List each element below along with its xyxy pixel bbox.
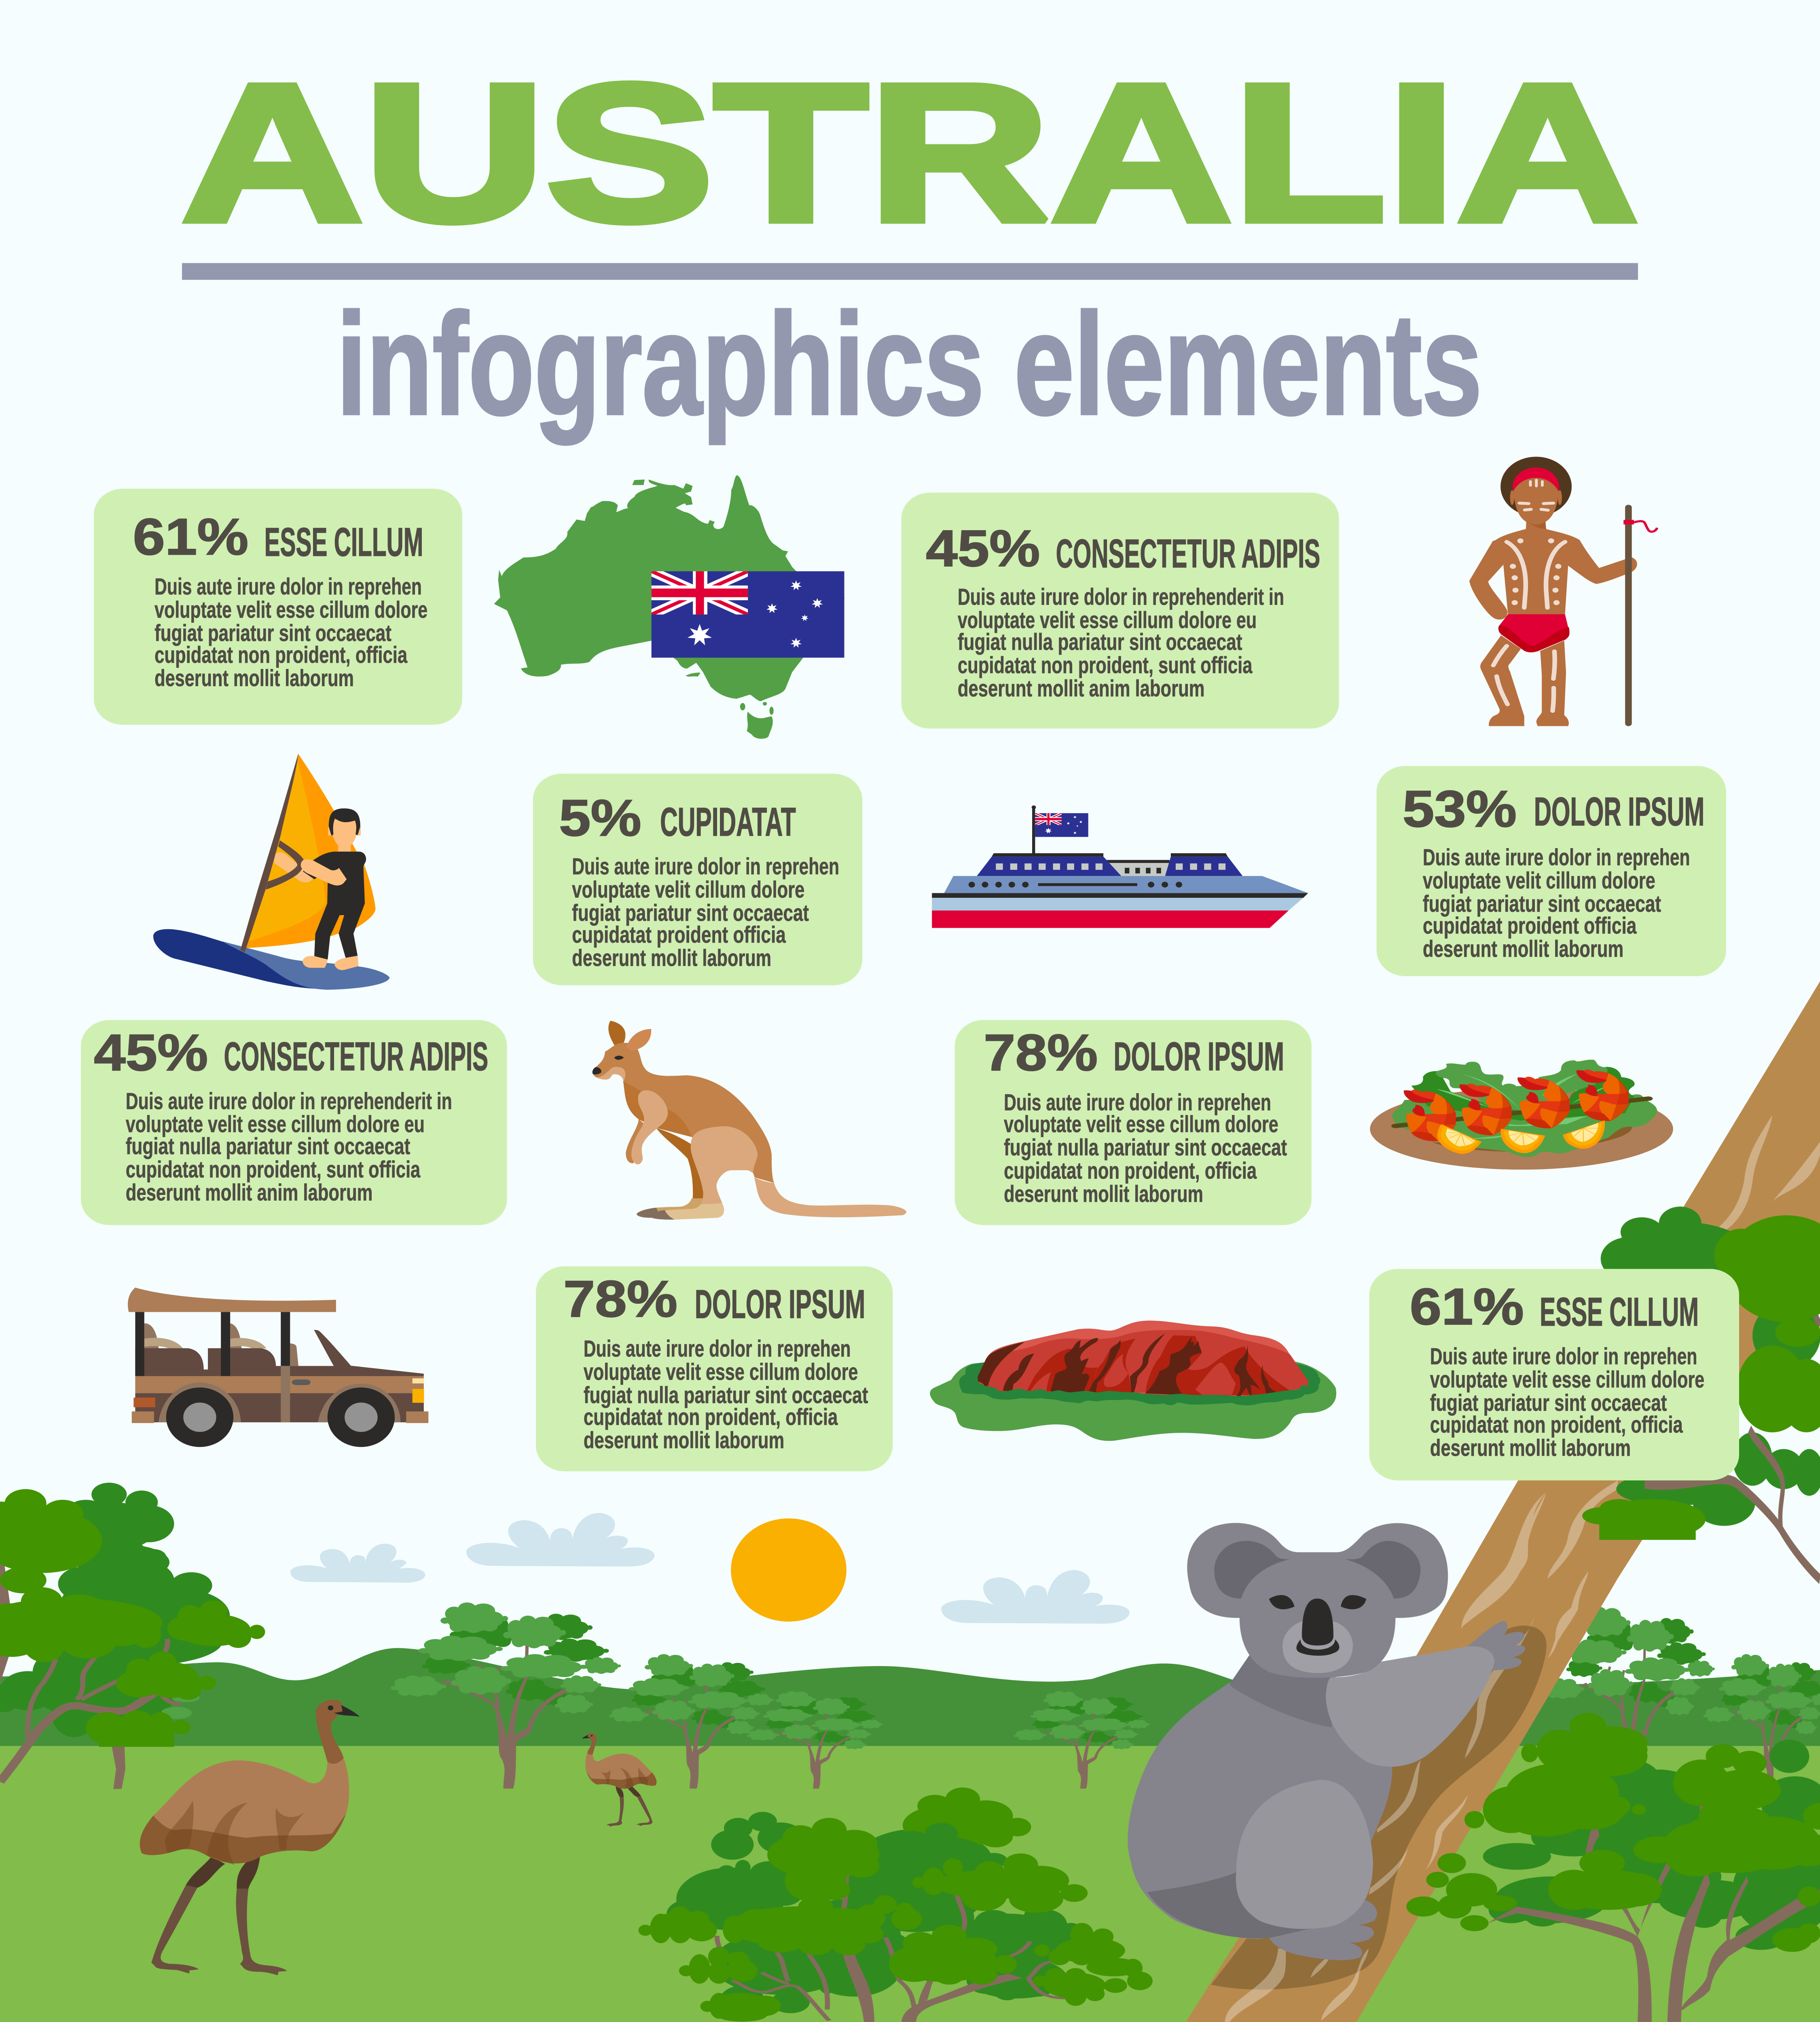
body text: Duis aute irure dolor in reprehenderit in: [126, 1088, 452, 1114]
heading: CUPIDATAT: [660, 800, 796, 844]
heading: ESSE CILLUM: [265, 520, 423, 565]
body text: voluptate velit esse cillum dolore: [1004, 1111, 1278, 1137]
body text: deserunt mollit laborum: [572, 945, 771, 971]
icon: Australia map with flag: [494, 475, 845, 739]
tree trunk: [1186, 981, 1820, 2022]
icon: shrimp salad plate: [1370, 1060, 1673, 1170]
koala paw: [1468, 1621, 1525, 1670]
body text: [1423, 844, 1690, 962]
koala arm: [1326, 1646, 1494, 1767]
heading: DOLOR IPSUM: [1114, 1034, 1284, 1079]
body text: Duis aute irure dolor in reprehen: [1423, 844, 1690, 870]
koala: [1128, 1523, 1525, 1960]
body text: Duis aute irure dolor in reprehen: [154, 573, 422, 599]
body text: [126, 1088, 452, 1206]
scene: front centre tree: [638, 1787, 1153, 2022]
small emu: [582, 1733, 656, 1827]
body text: Duis aute irure dolor in reprehen: [572, 853, 839, 879]
scene: upper right tree: [1582, 1207, 1820, 1579]
body text: voluptate velit esse cillum dolore eu: [958, 607, 1257, 633]
bark marks: [1225, 1115, 1820, 2022]
body text: Duis aute irure dolor in reprehen: [584, 1336, 851, 1362]
body text: deserunt mollit laborum: [584, 1427, 784, 1453]
koala body: [1128, 1682, 1392, 1939]
body text: cupidatat non proident, officia: [584, 1404, 838, 1430]
spear: [1623, 505, 1657, 726]
panel: 45% consectetur adipis left: [81, 1020, 507, 1225]
stat: 5%: [559, 789, 641, 847]
scene: clouds: [290, 1513, 1130, 1624]
panel: 5% cupidatat: [533, 774, 862, 985]
body text: fugiat nulla pariatur sint occaecat: [584, 1382, 868, 1408]
icon: sun: [731, 1519, 847, 1622]
body text: deserunt mollit anim laborum: [958, 675, 1205, 701]
panel: 78% dolor ipsum right: [955, 1020, 1312, 1225]
panel: 61% esse cillum: [94, 489, 462, 725]
stat: 45%: [94, 1024, 208, 1081]
body text: [584, 1336, 868, 1453]
body text: [1004, 1089, 1287, 1207]
body text: Duis aute irure dolor in reprehenderit in: [958, 584, 1284, 610]
panel: 45% consectetur adipis top: [902, 493, 1339, 729]
icon: ship: [932, 806, 1308, 928]
body text: cupidatat proident officia: [572, 922, 786, 948]
heading: CONSECTETUR ADIPIS: [1056, 532, 1320, 576]
icon: kangaroo: [593, 1021, 906, 1220]
body text: cupidatat non proident, sunt officia: [126, 1157, 421, 1182]
icon: Australian flag: [652, 571, 844, 658]
body text: deserunt mollit laborum: [1004, 1181, 1203, 1207]
body text: cupidatat non proident, officia: [1430, 1412, 1683, 1438]
panel: 61% esse cillum right: [1369, 1269, 1739, 1481]
body text: voluptate velit esse cillum dolore: [154, 597, 427, 623]
body text: [154, 573, 427, 691]
body text: fugiat nulla pariatur sint occaecat: [1004, 1134, 1287, 1160]
panel: 53% dolor ipsum: [1377, 766, 1726, 976]
stat: 53%: [1403, 780, 1517, 838]
body text: [958, 584, 1284, 701]
koala foot: [1269, 1900, 1377, 1960]
large emu: [140, 1700, 360, 1975]
body text: fugiat pariatur sint occaecat: [154, 620, 392, 646]
body text: fugiat pariatur sint occaecat: [1430, 1390, 1667, 1416]
heading: DOLOR IPSUM: [695, 1282, 865, 1327]
body text: voluptate velit cillum dolore: [572, 877, 804, 903]
icon: aboriginal man: [1469, 457, 1657, 726]
icon: safari jeep: [128, 1288, 428, 1447]
body text: Duis aute irure dolor in reprehen: [1004, 1089, 1271, 1115]
body text: voluptate velit esse cillum dolore eu: [126, 1111, 425, 1137]
stat: 45%: [926, 519, 1040, 577]
shrimp: [1404, 1070, 1629, 1141]
scene: left tree: [0, 1483, 265, 1789]
body text: voluptate velit cillum dolore: [1423, 867, 1655, 893]
icon: Uluru rock: [930, 1320, 1336, 1441]
scene: right foreground tree: [1406, 1713, 1820, 2022]
body text: fugiat nulla pariatur sint occaecat: [126, 1133, 410, 1159]
icon: ship flag: [1035, 813, 1088, 837]
stat: 61%: [133, 508, 248, 565]
scene: distant trees: [391, 1603, 1820, 1789]
body text: voluptate velit esse cillum dolore: [584, 1359, 858, 1385]
trunk shadow: [1211, 1626, 1547, 1990]
stat: 61%: [1410, 1277, 1524, 1335]
scene: grass: [0, 1746, 1820, 2022]
body text: cupidatat non proident, sunt officia: [958, 652, 1253, 678]
panel: 78% dolor ipsum centre: [536, 1266, 893, 1471]
stat: 78%: [563, 1270, 677, 1328]
title: AUSTRALIA: [181, 43, 1639, 262]
stat: 78%: [984, 1024, 1098, 1081]
body text: deserunt mollit laborum: [154, 665, 354, 691]
body text: deserunt mollit anim laborum: [126, 1180, 372, 1206]
koala head: [1187, 1523, 1448, 1678]
heading: CONSECTETUR ADIPIS: [224, 1034, 488, 1079]
scene: hills: [0, 1648, 1820, 1746]
body text: cupidatat non proident, officia: [1004, 1158, 1257, 1184]
lemon slices: [1437, 1120, 1605, 1154]
body text: fugiat nulla pariatur sint occaecat: [958, 629, 1242, 655]
body text: deserunt mollit laborum: [1430, 1435, 1631, 1461]
body text: [1430, 1343, 1704, 1461]
body text: cupidatat proident officia: [1423, 913, 1637, 939]
body text: fugiat pariatur sint occaecat: [1423, 891, 1661, 917]
body text: deserunt mollit laborum: [1423, 936, 1623, 962]
icon: windsurfer: [153, 753, 389, 990]
koala leg: [1236, 1780, 1373, 1929]
body text: fugiat pariatur sint occaecat: [572, 900, 809, 926]
body text: cupidatat non proident, officia: [154, 642, 408, 668]
body text: [572, 853, 839, 971]
